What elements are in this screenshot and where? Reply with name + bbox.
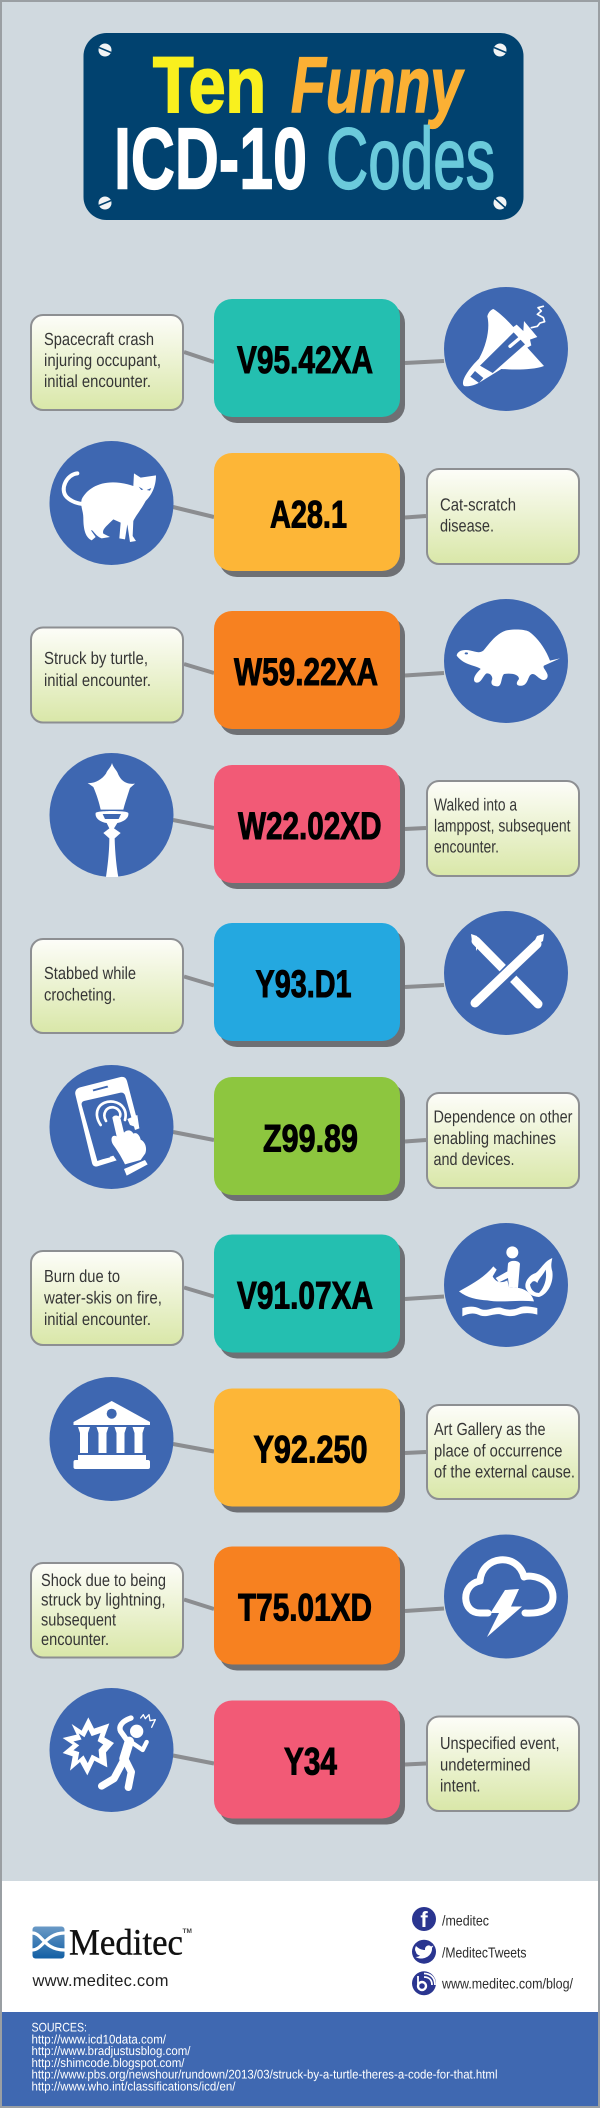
code box: W22.02XD xyxy=(238,805,382,848)
row 7: V91.07XA xyxy=(31,1223,568,1358)
title text: Codes xyxy=(326,110,495,208)
row 2: A28.1 xyxy=(50,441,579,577)
code box: W59.22XA xyxy=(234,651,378,694)
social: facebook: f xyxy=(420,1907,428,1932)
note: encounter. xyxy=(434,836,499,856)
note: water-skis on fire, xyxy=(43,1288,162,1308)
note xyxy=(31,315,183,410)
note: Stabbed while xyxy=(44,963,136,983)
title text: ICD-10 xyxy=(114,110,307,208)
row 1: V95.42XA xyxy=(31,287,568,423)
note xyxy=(427,469,579,564)
row 9: T75.01XD xyxy=(31,1534,568,1670)
note: undetermined xyxy=(440,1754,530,1774)
social: twitter xyxy=(412,1940,526,1964)
note: subsequent xyxy=(41,1610,116,1630)
note: Walked into a xyxy=(434,794,517,814)
note xyxy=(427,781,579,876)
title text xyxy=(114,40,495,208)
note: and devices. xyxy=(434,1149,514,1169)
social: twitter: /MeditecTweets xyxy=(442,1945,526,1961)
note xyxy=(31,1251,183,1345)
Meditec logo: Meditec xyxy=(69,1922,183,1964)
note: initial encounter. xyxy=(44,371,151,391)
sources band: http://www.bradjustusblog.com/ xyxy=(32,2044,191,2058)
social: facebook xyxy=(412,1907,489,1932)
note xyxy=(31,628,183,722)
row 8: Y92.250 xyxy=(50,1377,579,1512)
code box: Y34 xyxy=(284,1740,337,1784)
icon: space shuttle xyxy=(444,287,568,411)
website: www.meditec.com xyxy=(32,1972,168,1990)
note xyxy=(31,1563,183,1658)
note: Spacecraft crash xyxy=(44,329,154,349)
code box: Y92.250 xyxy=(254,1428,368,1472)
code box xyxy=(214,611,405,735)
title panel xyxy=(84,33,524,220)
note: place of occurrence xyxy=(434,1440,562,1460)
note: initial encounter. xyxy=(44,1309,151,1329)
sources band xyxy=(0,2012,600,2106)
icon: touchscreen phone xyxy=(50,1065,174,1189)
icon: storm cloud xyxy=(444,1534,568,1658)
title text: Funny xyxy=(291,40,465,129)
icon: crochet hooks xyxy=(444,911,568,1035)
code box xyxy=(214,1700,405,1824)
code box: Y93.D1 xyxy=(256,963,352,1006)
row 10: Y34 xyxy=(50,1688,579,1824)
code box: Z99.89 xyxy=(263,1118,358,1160)
note: encounter. xyxy=(41,1629,109,1649)
screws xyxy=(98,44,506,210)
code box xyxy=(214,1388,405,1512)
sources band: SOURCES: xyxy=(32,2020,87,2034)
Meditec logo: TM xyxy=(182,1928,192,1935)
code box: V91.07XA xyxy=(237,1274,373,1318)
row 4: W22.02XD xyxy=(50,753,579,889)
note: enabling machines xyxy=(434,1128,556,1148)
icon: explosion and person xyxy=(50,1688,174,1812)
code box xyxy=(214,1546,405,1670)
note: of the external cause. xyxy=(434,1462,575,1482)
sources band: http://shimcode.blogspot.com/ xyxy=(32,2056,185,2070)
note xyxy=(427,1093,579,1188)
note: Cat-scratch xyxy=(440,494,516,514)
footer: white band xyxy=(0,1881,600,2012)
social: blog xyxy=(412,1971,574,1995)
icon: art gallery building xyxy=(50,1377,174,1501)
note: intent. xyxy=(440,1776,480,1796)
note xyxy=(427,1405,579,1499)
code box xyxy=(214,453,405,577)
code box: V95.42XA xyxy=(237,339,373,382)
code box: A28.1 xyxy=(270,494,347,536)
icon: turtle xyxy=(444,599,568,723)
note xyxy=(31,939,183,1033)
code box xyxy=(214,923,405,1047)
code box xyxy=(214,1077,405,1201)
social: blog: www.meditec.com/blog/ xyxy=(441,1977,574,1993)
title text: Ten xyxy=(153,40,266,129)
sources band: http://www.icd10data.com/ xyxy=(32,2032,166,2046)
note: disease. xyxy=(440,516,494,536)
note: injuring occupant, xyxy=(44,350,161,370)
note: Struck by turtle, xyxy=(44,648,148,668)
note: Art Gallery as the xyxy=(434,1419,546,1439)
icon: lamppost xyxy=(50,753,174,877)
code box xyxy=(214,299,405,423)
icon: burning jet ski xyxy=(444,1223,568,1347)
sources band: http://www.pbs.org/newshour/rundown/2013/03/struck-by-a-turtle-theres-a-code-for-that.html xyxy=(32,2068,498,2082)
note: Shock due to being xyxy=(41,1570,166,1590)
code box xyxy=(214,765,405,889)
code box: T75.01XD xyxy=(238,1586,372,1630)
note: Burn due to xyxy=(44,1266,120,1286)
note xyxy=(427,1716,579,1811)
row 3: W59.22XA xyxy=(31,599,568,735)
social: facebook: /meditec xyxy=(442,1914,489,1930)
sources band: http://www.who.int/classifications/icd/en/ xyxy=(32,2079,236,2093)
note: initial encounter. xyxy=(44,670,151,690)
icon: cat xyxy=(50,441,174,565)
note: Dependence on other xyxy=(434,1106,573,1126)
note: crocheting. xyxy=(44,984,116,1004)
row 6: Z99.89 xyxy=(50,1065,579,1201)
note: struck by lightning, xyxy=(41,1590,166,1610)
code box xyxy=(214,1234,405,1358)
row 5: Y93.D1 xyxy=(31,911,568,1047)
note: Unspecified event, xyxy=(440,1733,560,1753)
